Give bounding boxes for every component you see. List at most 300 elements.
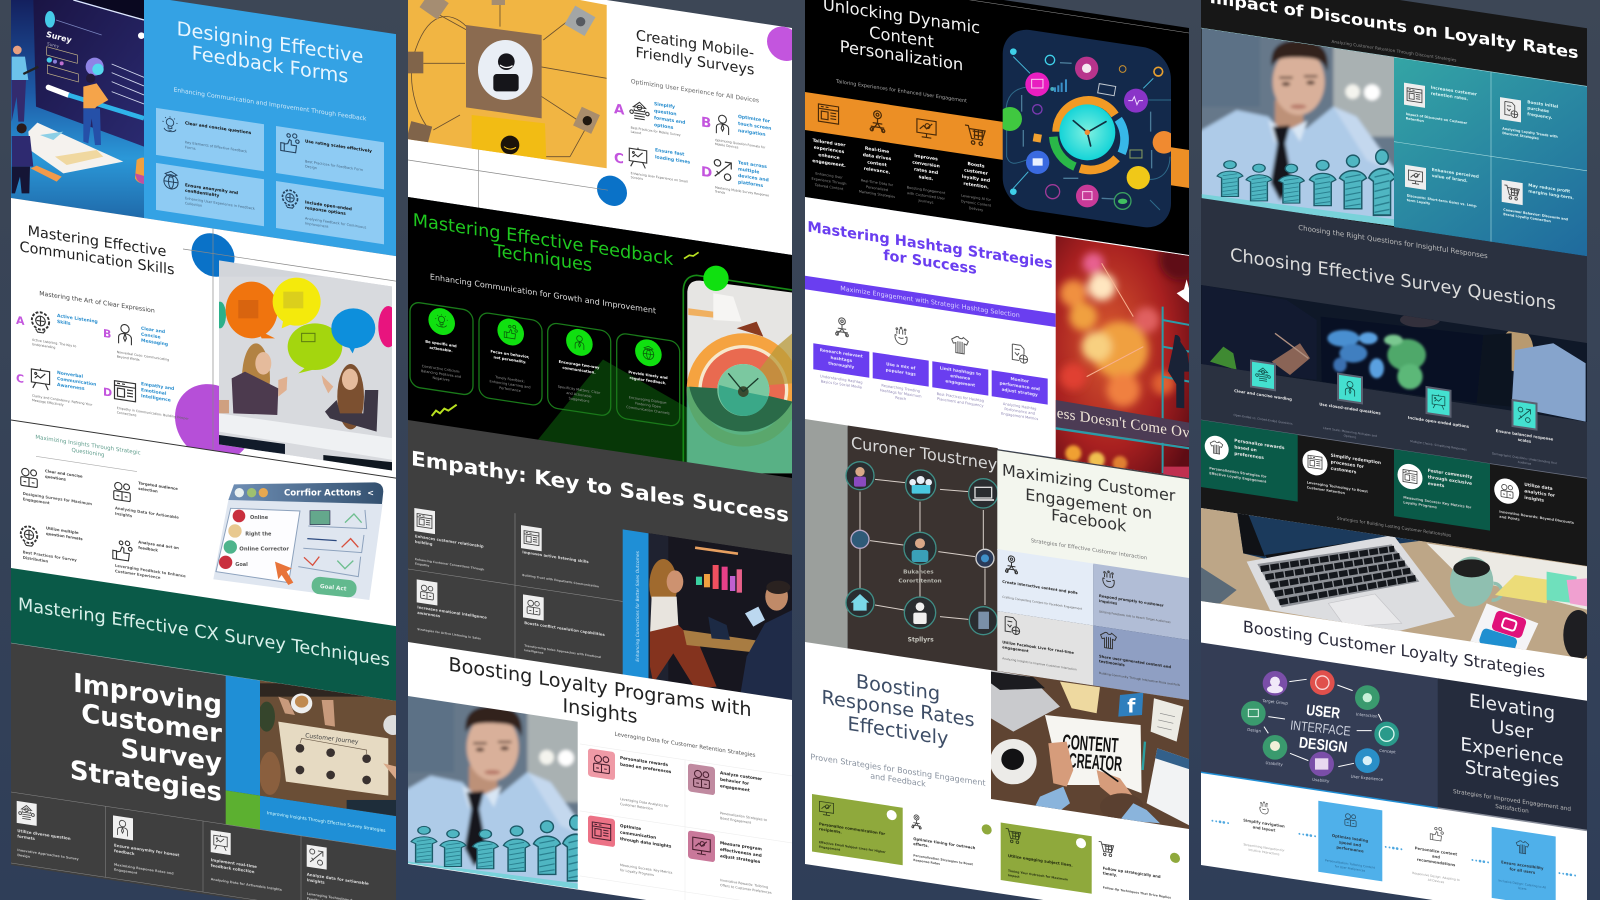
subtitle: Questioning xyxy=(71,448,105,459)
item: conflict: Transforming Sales Approaches with Emotional xyxy=(524,644,601,659)
illustration: survey builder with people: Surey xyxy=(46,41,60,50)
column: loyalty: Dynamic Content xyxy=(961,199,992,208)
item D: Empathy in Communication: Building Deeper xyxy=(117,406,189,421)
item D: Connections xyxy=(117,410,137,417)
card: limit: engagement xyxy=(945,378,975,388)
title: Techniques xyxy=(493,240,592,276)
card: research xyxy=(813,314,869,391)
slide: boosting response rates effectively xyxy=(805,642,1192,900)
cell: interactive content: Create interactive content and polls xyxy=(1002,580,1078,595)
card: navigation: and layout xyxy=(1253,824,1275,833)
card: be specific: Constructive Criticism: xyxy=(422,364,460,374)
subtitle: Leveraging Data for Customer Retention Strategies xyxy=(615,732,756,759)
slide: mastering effective feedback techniques xyxy=(408,197,800,479)
connector dots xyxy=(1211,819,1576,877)
card: be specific: Negatives xyxy=(433,376,450,382)
item: personalize rewards: based on xyxy=(1234,444,1257,454)
subtitle band xyxy=(805,276,1056,327)
card: anonymity: Ensure anonymity and xyxy=(185,182,238,195)
photo: bokeh with success banner xyxy=(1053,233,1200,490)
item: clear wording xyxy=(1233,357,1293,426)
item D: Emotional xyxy=(141,387,167,397)
column: tailored: Tailored Content xyxy=(814,183,844,191)
card: analyze data: insights xyxy=(307,877,325,885)
title: Strategies xyxy=(70,756,222,808)
slide: boosting customer loyalty strategies xyxy=(1200,503,1593,701)
column: tailored: experiences xyxy=(814,145,845,155)
illustration: survey builder with people: Surey xyxy=(45,30,73,45)
column: loyalty: customer xyxy=(964,167,989,177)
card: timing: Optimize timing for outreach xyxy=(913,836,976,850)
photo: businessman with paper figures xyxy=(381,686,607,900)
card: limit: Limit hashtags to xyxy=(940,365,981,377)
card: mix xyxy=(873,323,929,405)
card: focus on behavior: Enhancing Learning and xyxy=(490,379,530,389)
card: anonymity xyxy=(156,163,264,226)
slide: boosting loyalty programs with insights xyxy=(381,642,792,900)
item D: Trends xyxy=(714,189,725,195)
photo: sales conversation in cafe xyxy=(648,530,795,703)
cell: brand value: term Loyalty xyxy=(1407,198,1431,206)
photo: laptop and sticky notes xyxy=(1200,503,1593,663)
cell: retention: Retention xyxy=(1406,116,1424,123)
column: conversion: conversion xyxy=(912,160,940,170)
cell: retention: Increases customer xyxy=(1431,85,1478,97)
card: measure program: Innovative Rewards: Tailoring xyxy=(720,878,768,889)
card: analyze behavior: Analyze customer xyxy=(720,770,763,782)
card: monitor: Performance and xyxy=(1004,407,1035,416)
title: Experience xyxy=(1460,734,1564,771)
title: User xyxy=(1491,716,1533,744)
cell: live: engagement xyxy=(1002,645,1029,653)
card: optimize communication: Measuring Success: Key Metrics xyxy=(620,863,673,875)
item B: Optimizing Question Formats for xyxy=(715,138,766,150)
column: tailored: Tailored user xyxy=(813,138,846,149)
slide: unlocking dynamic content personalization xyxy=(805,0,1189,255)
card: timely: Fostering Open xyxy=(635,401,661,409)
network diagram: Stpllyrs xyxy=(908,637,934,644)
item B: Nonverbal Cues: Communicating xyxy=(117,350,169,362)
column: loyalty: Boosts xyxy=(967,161,985,170)
card: loading speed: for User Preferences xyxy=(1335,864,1366,873)
network diagram xyxy=(846,462,998,644)
card: timing: efforts. xyxy=(913,841,929,848)
cell: share: Share user-generated content and xyxy=(1099,654,1171,669)
cell: purchase: Boosts initial xyxy=(1527,99,1559,109)
item: listening xyxy=(521,525,599,589)
item: closed-ended: Likert Scale: Measuring Attitudes and xyxy=(1323,426,1377,438)
card: personalize communication: recipients. xyxy=(819,826,842,835)
card: research: hashtags xyxy=(830,355,853,363)
cell: brand value xyxy=(1405,163,1479,213)
item A: Active Listening xyxy=(57,313,98,325)
slide: customer journey network xyxy=(805,419,998,672)
cell: share: Building Community Through Interactive Posts and Polls xyxy=(1099,671,1181,687)
item B: B xyxy=(701,114,711,132)
item: clear and concise: questions xyxy=(45,474,67,482)
user interface design cycle diagram: User Experience xyxy=(1350,774,1384,782)
column 2 xyxy=(381,0,801,900)
item: relationship xyxy=(414,508,484,576)
card: mix: Reach xyxy=(895,396,906,401)
card: optimize communication: communication xyxy=(620,830,656,840)
title: Creating Mobile- xyxy=(636,28,754,62)
card: personalize content: All Devices xyxy=(1428,878,1445,884)
title: Improving xyxy=(73,669,222,721)
column: real-time: Personalized xyxy=(866,185,888,192)
card: mix: popular tags xyxy=(886,367,916,377)
card: diverse formats xyxy=(17,801,80,866)
column: conversion: with Customized User xyxy=(907,191,946,201)
title: Survey xyxy=(120,734,222,779)
card: research: thoroughly xyxy=(828,361,855,369)
slide: elevating user experience strategies xyxy=(1201,642,1587,832)
subtitle: Strategies for Effective Customer Interaction xyxy=(1031,538,1147,562)
card: personalize rewards: Customer Retention xyxy=(620,802,653,811)
vertical caption: Enhancing Connections for Better Sales Outcomes xyxy=(635,550,641,662)
column: loyalty: loyalty and xyxy=(962,174,990,184)
card: two-way: Specificity Matters: Clear xyxy=(558,385,601,395)
column: real-time: relevance. xyxy=(864,166,890,176)
item: community: events xyxy=(1428,481,1445,489)
item: redemption: customers xyxy=(1331,466,1357,476)
item: clear and concise xyxy=(20,468,92,506)
cell: retention: retention rates. xyxy=(1431,91,1468,101)
column: tailored: Enhancing User xyxy=(815,172,843,180)
column 1 xyxy=(11,0,403,900)
column: tailored: enhance xyxy=(818,152,840,161)
item: relationship: Enhances customer relationship xyxy=(415,533,484,549)
card: two-way xyxy=(548,322,611,417)
card: monitor xyxy=(992,341,1048,423)
item: redemption: Simplify redemption xyxy=(1331,453,1381,466)
item B: Optimize for xyxy=(738,114,771,125)
item: personalize rewards xyxy=(1205,433,1285,487)
card: subject lines: Utilize engaging subject lines. xyxy=(1008,853,1073,868)
column: loyalty xyxy=(961,160,992,214)
item: community xyxy=(1398,462,1472,515)
column: loyalty: Leveraging AI for xyxy=(961,194,991,202)
card: personalize rewards: Personalize rewards xyxy=(620,755,668,767)
card: monitor: performance and xyxy=(999,380,1040,391)
item: community: Loyalty Programs xyxy=(1403,500,1437,509)
illustration: corrective actions window: Right the xyxy=(245,531,272,537)
card: personalize rewards: Leveraging Data Analytics for xyxy=(620,797,669,808)
card: personalize content: Personalize content xyxy=(1415,845,1457,857)
column: tailored xyxy=(812,138,846,192)
card: rating scales: Design xyxy=(305,164,317,170)
item: open-ended: Include open-ended options xyxy=(1408,415,1470,429)
item: analytics: Utilize data xyxy=(1524,482,1553,492)
card: research: Understanding Hashtag xyxy=(820,374,863,385)
item: relationship: Empathy xyxy=(415,562,429,568)
card: accessibility: for all users xyxy=(1510,866,1536,875)
card: mix: Researching Trending xyxy=(881,384,920,393)
column: loyalty: Delivery xyxy=(969,206,983,212)
slide: choosing effective survey questions xyxy=(1200,198,1590,478)
title: Boosting Loyalty Programs with xyxy=(449,653,751,721)
item: personalize rewards: Personalization Strategies for xyxy=(1209,466,1267,479)
title: Friendly Surveys xyxy=(636,45,754,79)
item C: C xyxy=(16,372,24,386)
card: limit xyxy=(932,333,988,409)
cell: margins: Consumer Behavior: Discounts and xyxy=(1503,208,1569,222)
item: emotional intelligence: awareness xyxy=(417,610,441,618)
item: analytics: analytics for xyxy=(1524,488,1556,499)
card: open-ended: Improvement xyxy=(305,221,329,229)
card: clear and concise: Key Elements of Effective Feedback xyxy=(185,140,248,154)
column: tailored: engagement. xyxy=(812,158,846,169)
card: measure program: Measure program xyxy=(720,840,763,852)
item: closed-ended: Opinions xyxy=(1344,434,1357,440)
title: Facebook xyxy=(1051,505,1127,536)
card: subject lines: Impact xyxy=(1008,873,1020,879)
item D: multiple xyxy=(738,166,759,176)
item: analytics: and Points xyxy=(1499,515,1520,522)
card: subject lines: Timing Your Outreach for Maximum xyxy=(1008,869,1068,882)
item: closed-ended xyxy=(1319,370,1381,443)
item B: Concise xyxy=(141,332,160,341)
slide: empathy key to sales success xyxy=(408,420,795,703)
item: balanced scales: Ensure balanced response xyxy=(1496,428,1554,442)
card: clear and concise: Clear and concise questions xyxy=(185,120,252,135)
band below photo with icons xyxy=(1201,352,1587,478)
column: real-time: data drives xyxy=(863,152,892,162)
column: conversion: Journeys xyxy=(918,198,934,205)
item C: Ensure fast xyxy=(655,147,685,158)
item: analyze and act: Leveraging Feedback to Enhance xyxy=(115,563,186,578)
slide: improving customer survey strategies xyxy=(11,643,403,900)
card: anonymity: Engagement xyxy=(114,868,138,875)
card: research: Research relevant xyxy=(820,347,863,359)
photo: content creator desk xyxy=(988,667,1192,833)
card: be specific: Balancing Positives and xyxy=(421,369,461,379)
card: personalize content: recommendations xyxy=(1417,857,1456,867)
cell: respond: inquiries xyxy=(1099,599,1118,606)
column: conversion: Improves xyxy=(914,153,938,163)
card: follow up: Follow-Up Techniques That Drive Replies xyxy=(1103,885,1171,900)
item D: Test across xyxy=(738,160,767,170)
item: analyze and act: Analyze and act on xyxy=(138,539,179,550)
item: balanced scales xyxy=(1492,396,1558,470)
subtitle: Strategies for Improved Engagement and xyxy=(1453,789,1571,813)
slide: mastering effective communication skills xyxy=(11,198,398,488)
card: accessibility: Ensure accessibility xyxy=(1501,859,1544,871)
slide: strategies for building lasting customer relationships xyxy=(1201,420,1587,568)
card: personalize communication: Engagement xyxy=(819,845,841,852)
title: Elevating xyxy=(1469,691,1555,724)
card: be specific: actionable. xyxy=(429,346,453,353)
item: community: Measuring Success: Key Metrics for xyxy=(1403,495,1472,510)
item A: Active Listening: The Key to xyxy=(32,338,76,348)
column: real-time: Real-Time Data for xyxy=(861,178,894,187)
column: real-time: Marketing Strategies xyxy=(859,190,895,199)
card: be specific: Be specific and xyxy=(425,340,457,348)
item C: C xyxy=(614,150,624,168)
illustration: corrective actions window: Corrfior Acttons xyxy=(284,488,361,498)
text: communication skills content xyxy=(16,222,189,426)
cell: purchase: Analyzing Loyalty Trends with xyxy=(1502,127,1558,139)
cell: margins: May reduce profit xyxy=(1528,182,1570,194)
title: Feedback Forms xyxy=(192,41,348,88)
network diagram: Corortitenton xyxy=(898,579,942,585)
item: multiple formats: Best Practices for Survey xyxy=(23,549,77,563)
item B: B xyxy=(103,327,111,341)
card: two-way: communication. xyxy=(562,366,596,375)
slide: creating mobile-friendly surveys xyxy=(407,0,801,256)
column 4 xyxy=(1187,0,1593,900)
item C: Clarity and Consistency: Refining Your xyxy=(32,394,93,407)
item B xyxy=(104,324,169,362)
item: redemption: Leveraging Technology to Boost xyxy=(1307,480,1368,494)
card: analyze data xyxy=(307,845,369,900)
item: clear wording: Clear and concise wording xyxy=(1234,388,1292,402)
item: balanced scales: Demographic Questions: Understanding Your xyxy=(1492,451,1558,465)
column: real-time: content xyxy=(867,160,888,169)
title: for Success xyxy=(883,247,977,278)
text content of mobile surveys slide xyxy=(614,25,771,202)
item B: touch screen xyxy=(738,121,771,132)
title: Maximizing Customer xyxy=(1002,460,1176,505)
item A: Best Practices for Mobile Survey xyxy=(631,126,681,137)
orange band xyxy=(805,92,1189,188)
item B: Beyond Words xyxy=(117,354,140,362)
item C: Communication xyxy=(57,376,96,388)
card: timing: Response Rates xyxy=(913,858,940,866)
illustration: corrective actions window: Goal xyxy=(235,562,248,568)
card: loading speed: performance xyxy=(1336,844,1364,854)
item A: Skills xyxy=(57,319,71,327)
item: analytics: Innovative Rewards: Beyond Discounts xyxy=(1499,510,1574,525)
title: Insights xyxy=(563,694,637,728)
title: Designing Effective xyxy=(177,17,363,68)
item C: Awareness xyxy=(57,382,85,392)
subtitle: Proven Strategies for Boosting Engagement xyxy=(810,752,986,788)
card: limit: enhance xyxy=(950,373,970,381)
cell: live: Utilize Facebook Live for real-time xyxy=(1002,640,1074,655)
item D xyxy=(104,380,189,420)
card: anonymity: feedback xyxy=(114,848,135,856)
photo: two women with speech bubbles xyxy=(214,277,398,477)
illustration: survey builder with people xyxy=(11,0,147,220)
card: rating scales: Use rating scales effectively xyxy=(305,138,372,154)
card: be specific xyxy=(410,301,473,396)
title: Empathy: Key to Sales Success xyxy=(411,446,789,527)
network diagram: Bukances xyxy=(903,569,934,575)
item B: Mobile Devices xyxy=(715,142,739,150)
item: targeted audience xyxy=(113,482,179,519)
item A xyxy=(16,311,98,350)
card: measure program: Offers to Customer Preferences xyxy=(720,883,772,895)
card: analyze behavior xyxy=(688,763,767,827)
cell: share xyxy=(1093,626,1189,700)
item: balanced scales: scales xyxy=(1518,437,1532,444)
card: diverse formats: Utilize diverse question xyxy=(17,828,71,841)
column: conversion xyxy=(907,152,946,207)
item: listening: Improves active listening skills xyxy=(522,549,589,564)
item A: question xyxy=(654,108,677,118)
slide: ux strategies cards xyxy=(1201,773,1587,900)
caption: Strategies for Building Lasting Customer Relationships xyxy=(1337,516,1451,538)
cell: brand value: Discounts: Short-term Gains vs. Long- xyxy=(1407,194,1478,208)
card: open-ended: Include open-ended xyxy=(305,199,352,211)
user interface design cycle diagram: INTERFACE xyxy=(1290,718,1351,739)
photo: wooden profile block on yellow wall xyxy=(407,0,608,170)
cell: margins: margins long-term. xyxy=(1528,188,1574,200)
card: personalize communication: Personalize communication for xyxy=(819,821,885,836)
item: conflict: Intelligence xyxy=(524,648,544,655)
card: analyze behavior: engagement xyxy=(720,783,750,793)
subtitle: Tailoring Experiences for Enhanced User Engagement xyxy=(835,79,967,104)
card: accessibility: Users xyxy=(1518,886,1527,891)
item A: Simplify xyxy=(654,101,675,110)
slide panel: designing effective feedback forms xyxy=(144,0,396,256)
photo: businessman with paper figures xyxy=(1187,20,1413,247)
card: two-way: Encourage two-way xyxy=(559,360,600,370)
item D: platforms xyxy=(738,179,763,189)
item: multiple formats xyxy=(20,526,82,563)
user interface design cycle diagram: Design xyxy=(1247,727,1262,733)
card: optimize communication: Optimize xyxy=(620,823,641,831)
item: conflict xyxy=(523,594,605,664)
cell: purchase: Discount Strategies xyxy=(1502,131,1539,141)
photo: customer journey table: Customer Journey xyxy=(305,732,359,746)
column: conversion: Boosting Engagement xyxy=(907,185,946,195)
title: Personalization xyxy=(840,37,963,74)
card: two-way: and Actionable xyxy=(566,391,592,399)
cell: share: testimonials xyxy=(1099,659,1126,667)
card: subject lines xyxy=(1001,823,1092,894)
card: open-ended: response options xyxy=(305,205,346,216)
card: timely: regular feedback. xyxy=(630,376,667,386)
card: research: Basics for Social Media xyxy=(821,379,862,390)
item A xyxy=(614,95,685,142)
title: Strategies xyxy=(1465,757,1559,792)
item: personalize rewards: Effective Loyalty Engagement xyxy=(1209,471,1267,484)
item: relationship: Enhancing Customer Connections Through xyxy=(415,557,484,572)
cell: respond: Respond promptly to customer xyxy=(1099,594,1164,608)
item C: Nonverbal xyxy=(57,370,83,380)
card: timely: Communication Channels xyxy=(626,405,670,416)
slide: maximizing insights through strategic questioning xyxy=(11,420,396,628)
title: Mastering Effective CX Survey Techniques xyxy=(18,594,390,671)
card: real-time xyxy=(211,830,282,892)
card: personalize content: Responsive Design: Adapting to xyxy=(1412,871,1460,882)
card: timely: Provide timely and xyxy=(628,370,668,380)
card: analyze behavior: Boost Engagement xyxy=(720,816,752,825)
subtitle: Enhancing Communication for Growth and Improvement xyxy=(430,272,656,315)
card: optimize communication xyxy=(588,815,673,880)
caption: Improving Insights Through Effective Survey Strategies xyxy=(267,810,386,834)
cell: interactive content: Crafting Compelling Content for Facebook Engagement xyxy=(1002,595,1083,611)
subtitle: and Feedback xyxy=(870,771,926,789)
illustration: corrective actions window: Online Corrector xyxy=(239,547,289,553)
user interface design cycle diagram: Interaction xyxy=(1356,712,1378,719)
item C: loading times xyxy=(655,154,690,166)
item: multiple formats: question formats xyxy=(46,531,83,541)
item: closed-ended: Use closed-ended questions xyxy=(1319,401,1381,416)
user interface design cycle diagram: Usability xyxy=(1312,777,1330,784)
title: Mastering Effective xyxy=(28,224,166,260)
item: clear and concise: Clear and concise xyxy=(45,468,83,479)
card: loading speed xyxy=(1325,810,1376,874)
item B: navigation xyxy=(738,128,765,138)
cell: margins xyxy=(1502,178,1574,227)
card: measure program: effectiveness and xyxy=(720,847,762,858)
card: personalize communication: Effective Email Subject Lines for Higher xyxy=(819,840,886,854)
cell: purchase xyxy=(1500,95,1559,144)
column: real-time xyxy=(859,145,895,199)
